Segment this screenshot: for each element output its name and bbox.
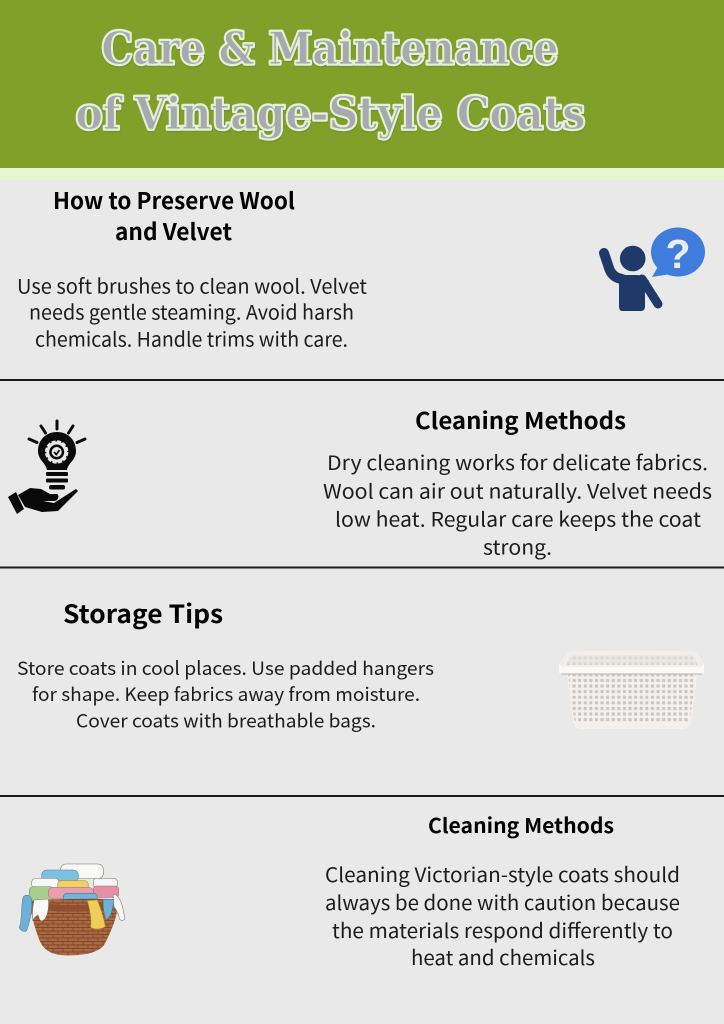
heading: cleaning methods: Cleaning Methods	[428, 809, 614, 839]
icon: white plastic basket	[559, 650, 704, 729]
heading: storage tips: Storage Tips	[63, 595, 223, 631]
divider	[0, 795, 724, 797]
panel: preserve wool and velvet	[17, 182, 705, 352]
text: preserve wool and velvet body: Use soft brushes to clean wool. Velvet	[17, 270, 367, 300]
title: of Vintage-Style Coats	[76, 87, 586, 140]
panel: cleaning methods	[8, 402, 712, 560]
text: preserve wool and velvet body: chemicals. Handle trims with care.	[35, 324, 348, 352]
icon: person asking a question: ?	[665, 231, 691, 277]
divider	[0, 379, 724, 381]
text: storage tips body: for shape. Keep fabrics away from moisture.	[32, 681, 420, 707]
icon: person asking a question	[604, 228, 705, 311]
text: storage tips body: Store coats in cool places. Use padded hangers	[17, 655, 434, 681]
text: victorian-style coats body: always be done with caution because	[325, 887, 680, 916]
heading: cleaning methods: Cleaning Methods	[415, 402, 626, 436]
text: storage tips body: Cover coats with breathable bags.	[76, 708, 376, 734]
title: Care & Maintenance	[102, 22, 558, 75]
text: victorian-style coats body: the materials respond differently to	[332, 915, 673, 944]
title: of Vintage-Style Coats	[76, 87, 586, 140]
text: cleaning methods body: Dry cleaning works for delicate fabrics.	[327, 447, 708, 476]
icon: laundry basket with towels	[19, 864, 125, 955]
title	[76, 22, 586, 142]
text: cleaning methods body: strong.	[483, 532, 552, 560]
panel: cleaning victorian-style coats	[19, 809, 680, 971]
header banner	[0, 0, 724, 180]
text: victorian-style coats body	[325, 859, 680, 971]
text: victorian-style coats body: Cleaning Victorian-style coats should	[325, 859, 680, 888]
title: Care & Maintenance	[102, 24, 559, 76]
title: of Vintage-Style Coats	[76, 88, 586, 142]
heading: how to preserve wool and velvet: and Velvet	[115, 213, 232, 247]
panel: storage tips	[17, 595, 704, 734]
text: victorian-style coats body: heat and chemicals	[411, 942, 595, 971]
heading: how to preserve wool and velvet: How to Preserve Wool	[53, 182, 295, 216]
text: storage tips body	[17, 655, 434, 734]
icon: light bulb over hand	[8, 421, 85, 514]
text: cleaning methods body: low heat. Regular care keeps the coat	[335, 504, 701, 532]
text: cleaning methods body: Wool can air out naturally. Velvet needs	[323, 476, 712, 504]
text: preserve wool and velvet body: needs gentle steaming. Avoid harsh	[29, 296, 354, 326]
text: cleaning methods body	[323, 447, 712, 560]
text: preserve wool and velvet body	[17, 270, 367, 352]
title: Care & Maintenance	[102, 22, 558, 75]
divider	[0, 566, 724, 568]
heading: how to preserve wool and velvet	[53, 182, 295, 247]
